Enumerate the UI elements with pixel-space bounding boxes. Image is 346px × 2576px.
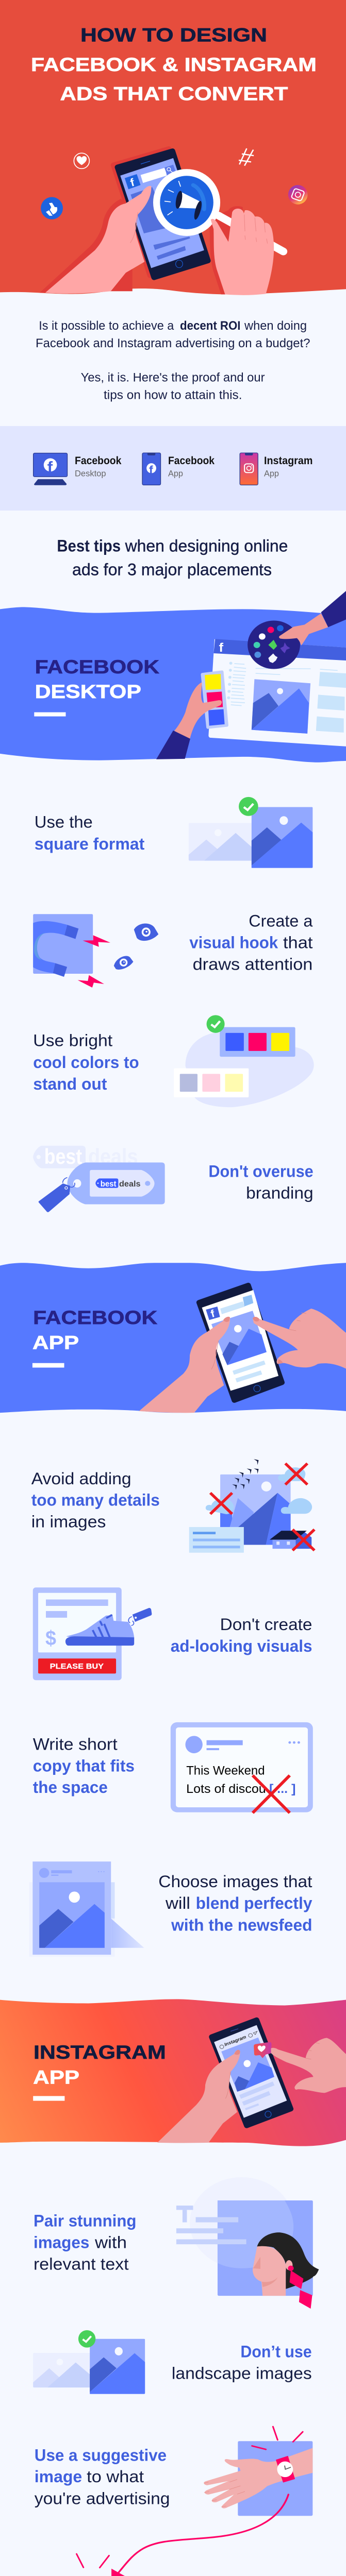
banner wave bbox=[0, 1999, 346, 2146]
title: ADS THAT CONVERT bbox=[60, 83, 288, 105]
illustration: hands, phone and magnifier bbox=[40, 149, 283, 295]
intro text: decent ROI bbox=[180, 319, 240, 333]
section heading bbox=[34, 656, 159, 716]
tip text bbox=[208, 1162, 314, 1202]
tip text bbox=[171, 1615, 312, 1655]
tip text: Don't create bbox=[220, 1615, 312, 1634]
illustration: busy image with crosses bbox=[189, 1459, 315, 1553]
tip: bright cool colors bbox=[33, 1015, 314, 1107]
illustration: pushy ad card: PLEASE BUY bbox=[50, 1663, 104, 1671]
tip: write short copy bbox=[33, 1722, 313, 1813]
icon: instagram badge bbox=[288, 185, 308, 205]
icon: desktop: f bbox=[47, 458, 53, 476]
label: Instagram App: App bbox=[264, 469, 279, 478]
tip text: too many details bbox=[31, 1491, 160, 1510]
tip text: you're advertising bbox=[35, 2489, 170, 2507]
panel: Facebook App section banner bbox=[0, 1263, 346, 1413]
tip text bbox=[35, 2446, 170, 2507]
illustration: magnet attracting eyes bbox=[33, 914, 158, 988]
heading: best tips: ads for 3 major placements bbox=[72, 561, 272, 579]
tip text: images bbox=[34, 2233, 89, 2251]
illustration: pushy ad card bbox=[33, 1587, 152, 1680]
tip: pair stunning images bbox=[34, 2177, 319, 2309]
panel: three placements legend bbox=[0, 426, 346, 511]
heading: best tips: Best tips bbox=[57, 537, 121, 555]
tip text: Create a bbox=[249, 911, 313, 930]
tip text: Choose images that bbox=[158, 1872, 312, 1891]
illustration: branded tag bbox=[33, 1144, 165, 1212]
icon: thumbs up bbox=[41, 197, 63, 219]
section heading: DESKTOP bbox=[35, 681, 141, 702]
section heading: INSTAGRAM bbox=[34, 2041, 166, 2063]
illustration: truncated post copy bbox=[171, 1722, 313, 1813]
label: Facebook Desktop bbox=[75, 455, 122, 478]
label: Instagram App: Instagram bbox=[264, 455, 312, 467]
tip text bbox=[33, 1031, 139, 1093]
tip: don't use landscape images bbox=[33, 2330, 312, 2394]
tip: use the square format bbox=[35, 797, 312, 868]
tip text: cool colors to bbox=[33, 1053, 139, 1072]
tip: don't create ad-looking visuals bbox=[33, 1587, 312, 1680]
label: Facebook App bbox=[168, 455, 215, 478]
tip text: visual hook bbox=[189, 934, 278, 952]
tip text: will bbox=[165, 1894, 190, 1912]
illustration: colour palettes bbox=[174, 1015, 314, 1107]
illustration: landscape vs square bbox=[33, 2330, 145, 2394]
illustration: hand with wristwatch bbox=[57, 2427, 312, 2576]
section heading: APP bbox=[32, 1331, 79, 1353]
tip: choose images that blend bbox=[29, 1861, 312, 1957]
tip text: Use a suggestive bbox=[35, 2446, 167, 2464]
illustration: truncated post copy: Lots of discou bbox=[186, 1782, 266, 1796]
illustration: branded tag: deals bbox=[88, 1144, 138, 1168]
illustration: browser page with palette and swatches bbox=[156, 591, 346, 759]
panel: hero header bbox=[0, 0, 346, 295]
tip text: square format bbox=[35, 835, 145, 853]
section heading bbox=[32, 1307, 157, 1367]
intro text: Facebook and Instagram advertising on a budget? bbox=[36, 336, 310, 350]
illustration: truncated post copy: [ ... ] bbox=[269, 1782, 295, 1796]
heading: best tips bbox=[57, 537, 288, 579]
illustration: hands liking a post in Instagram bbox=[157, 2020, 346, 2143]
tip text: with bbox=[94, 2233, 127, 2251]
illustration: hands, phone and magnifier: f bbox=[129, 176, 136, 189]
intro text bbox=[36, 319, 310, 402]
tip text bbox=[34, 2212, 136, 2273]
illustration: newsfeed card bbox=[29, 1861, 144, 1957]
tip text: relevant text bbox=[34, 2255, 129, 2273]
intro text: Yes, it is. Here's the proof and our bbox=[81, 370, 265, 384]
banner wave bbox=[0, 607, 346, 762]
tip text: draws attention bbox=[193, 955, 312, 974]
tip text bbox=[189, 911, 313, 974]
tip text: Don’t use bbox=[240, 2342, 312, 2361]
icon: hashtag bbox=[239, 148, 254, 166]
section heading: APP bbox=[33, 2066, 79, 2088]
tip text: Pair stunning bbox=[34, 2212, 136, 2230]
tip text: in images bbox=[31, 1513, 106, 1531]
tip text: ad-looking visuals bbox=[171, 1637, 312, 1655]
tip text: that bbox=[283, 934, 313, 952]
intro text: when doing bbox=[244, 319, 307, 333]
banner wave bbox=[0, 1263, 346, 1413]
tip: avoid too many details bbox=[31, 1459, 315, 1553]
illustration: branded tag: deals bbox=[119, 1180, 141, 1189]
tip text bbox=[31, 1469, 160, 1531]
heading: best tips: when designing online bbox=[125, 537, 288, 555]
tip text bbox=[33, 1735, 135, 1797]
intro text: tips on how to attain this. bbox=[104, 388, 242, 402]
illustration: branded tag: best bbox=[44, 1144, 82, 1168]
illustration: hands liking a post in Instagram: Instagram bbox=[223, 2035, 247, 2047]
icon: heart in ring bbox=[74, 153, 89, 168]
label: Facebook App: Facebook bbox=[168, 455, 215, 467]
tip text: copy that fits bbox=[33, 1756, 135, 1775]
tip: don't overuse branding bbox=[33, 1144, 314, 1212]
tip: create a visual hook bbox=[33, 911, 313, 988]
title: FACEBOOK & INSTAGRAM bbox=[31, 54, 317, 75]
tip text: landscape images bbox=[172, 2364, 312, 2383]
panel: Instagram App section banner bbox=[0, 1999, 346, 2146]
title bbox=[31, 24, 317, 105]
icon: facebook phone: f bbox=[149, 463, 153, 476]
illustration: landscape vs square image bbox=[189, 797, 312, 868]
title: HOW TO DESIGN bbox=[80, 24, 267, 45]
illustration: branded tag: best bbox=[101, 1180, 117, 1189]
tip text: Use the bbox=[35, 813, 93, 832]
tip text: Avoid adding bbox=[31, 1469, 131, 1488]
icon: facebook phone bbox=[142, 453, 161, 485]
tip text: the space bbox=[33, 1778, 108, 1797]
hero red wave background bbox=[0, 0, 346, 294]
tip text bbox=[158, 1872, 312, 1934]
intro text: Is it possible to achieve a bbox=[39, 319, 174, 333]
icon: desktop bbox=[34, 453, 68, 485]
label: Facebook App: App bbox=[168, 469, 183, 478]
label: Facebook Desktop: Facebook bbox=[75, 455, 122, 467]
tip text: to what bbox=[87, 2467, 144, 2486]
label: Instagram App bbox=[264, 455, 312, 478]
illustration: hands using Facebook app bbox=[139, 1285, 346, 1413]
tip text: branding bbox=[246, 1184, 314, 1202]
tip text: Don't overuse bbox=[208, 1162, 314, 1181]
section heading bbox=[33, 2041, 166, 2101]
illustration: browser page with palette and swatches: f bbox=[219, 641, 224, 655]
section heading: FACEBOOK bbox=[35, 656, 159, 677]
illustration: pushy ad card: $ bbox=[45, 1627, 56, 1650]
tip text: stand out bbox=[33, 1075, 107, 1093]
tip text: Write short bbox=[33, 1735, 118, 1753]
tip text: Use bright bbox=[33, 1031, 112, 1050]
tip text: image bbox=[35, 2467, 82, 2486]
tip text: with the newsfeed bbox=[171, 1916, 312, 1934]
tip text bbox=[35, 813, 145, 853]
illustration: truncated post copy: This Weekend bbox=[186, 1764, 265, 1777]
tip text: blend perfectly bbox=[196, 1894, 312, 1912]
illustration: portrait with text lines bbox=[176, 2177, 319, 2309]
tip text bbox=[172, 2342, 312, 2383]
arrow: pink curved arrow to clock bbox=[111, 2495, 288, 2576]
label: Facebook Desktop: Desktop bbox=[75, 469, 106, 478]
tip: use a suggestive image bbox=[35, 2427, 312, 2576]
illustration: hands using Facebook app: f bbox=[209, 1308, 216, 1320]
icon: instagram phone bbox=[240, 453, 258, 485]
panel: Facebook Desktop section banner bbox=[0, 591, 346, 762]
section heading: FACEBOOK bbox=[33, 1307, 157, 1328]
